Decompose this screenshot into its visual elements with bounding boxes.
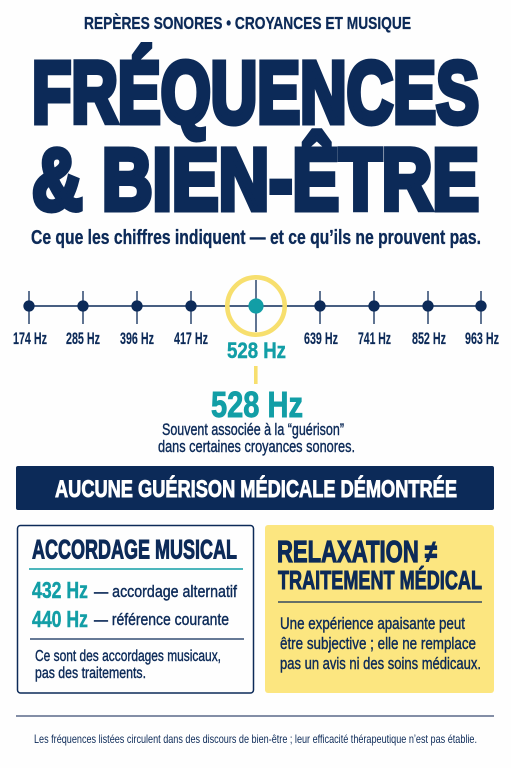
- title: [32, 44, 479, 228]
- 440 Hz row: 440 Hz: [32, 606, 88, 632]
- 440 Hz row: — référence courante: [94, 611, 229, 629]
- banner: [16, 466, 494, 510]
- panel body: Une expérience apaisante peut: [280, 615, 465, 633]
- 432 Hz row: — accordage alternatif: [94, 583, 237, 601]
- connector: [254, 366, 258, 384]
- 528 Hz description: dans certaines croyances sonores.: [158, 438, 355, 456]
- kicker: REPÈRES SONORES • CROYANCES ET MUSIQUE: [84, 12, 411, 33]
- 432 Hz row: 432 Hz: [32, 577, 88, 603]
- panel: relaxation: [265, 525, 494, 693]
- panel note: Ce sont des accordages musicaux,: [35, 648, 221, 665]
- frequency labels: 741 Hz: [358, 330, 391, 348]
- frequency labels: 639 Hz: [304, 330, 338, 348]
- 528 Hz description: [158, 421, 355, 456]
- frequency labels: [13, 330, 499, 348]
- panel heading: [277, 534, 482, 595]
- frequency labels: 396 Hz: [120, 330, 154, 348]
- panel note: [35, 648, 221, 682]
- frequency timeline: [13, 277, 499, 363]
- 432 Hz row: [32, 577, 237, 603]
- frequency labels: 417 Hz: [174, 330, 208, 348]
- panel heading: ACCORDAGE MUSICAL: [32, 534, 237, 564]
- frequency labels: 285 Hz: [66, 330, 100, 348]
- 528 Hz description: Souvent associée à la “guérison”: [162, 421, 344, 439]
- 440 Hz row: [32, 606, 229, 632]
- highlighted 528 Hz marker: [227, 277, 285, 335]
- panel body: [280, 615, 481, 673]
- small 528 Hz label: 528 Hz: [227, 338, 286, 363]
- panel: accordage musical: [18, 526, 254, 693]
- panel heading: RELAXATION ≠: [277, 534, 437, 569]
- frequency labels: 174 Hz: [13, 330, 47, 348]
- frequency labels: 852 Hz: [412, 330, 446, 348]
- big 528 Hz: 528 Hz: [211, 384, 303, 425]
- ticks and dots: [24, 291, 486, 324]
- panel note: pas des traitements.: [35, 665, 146, 682]
